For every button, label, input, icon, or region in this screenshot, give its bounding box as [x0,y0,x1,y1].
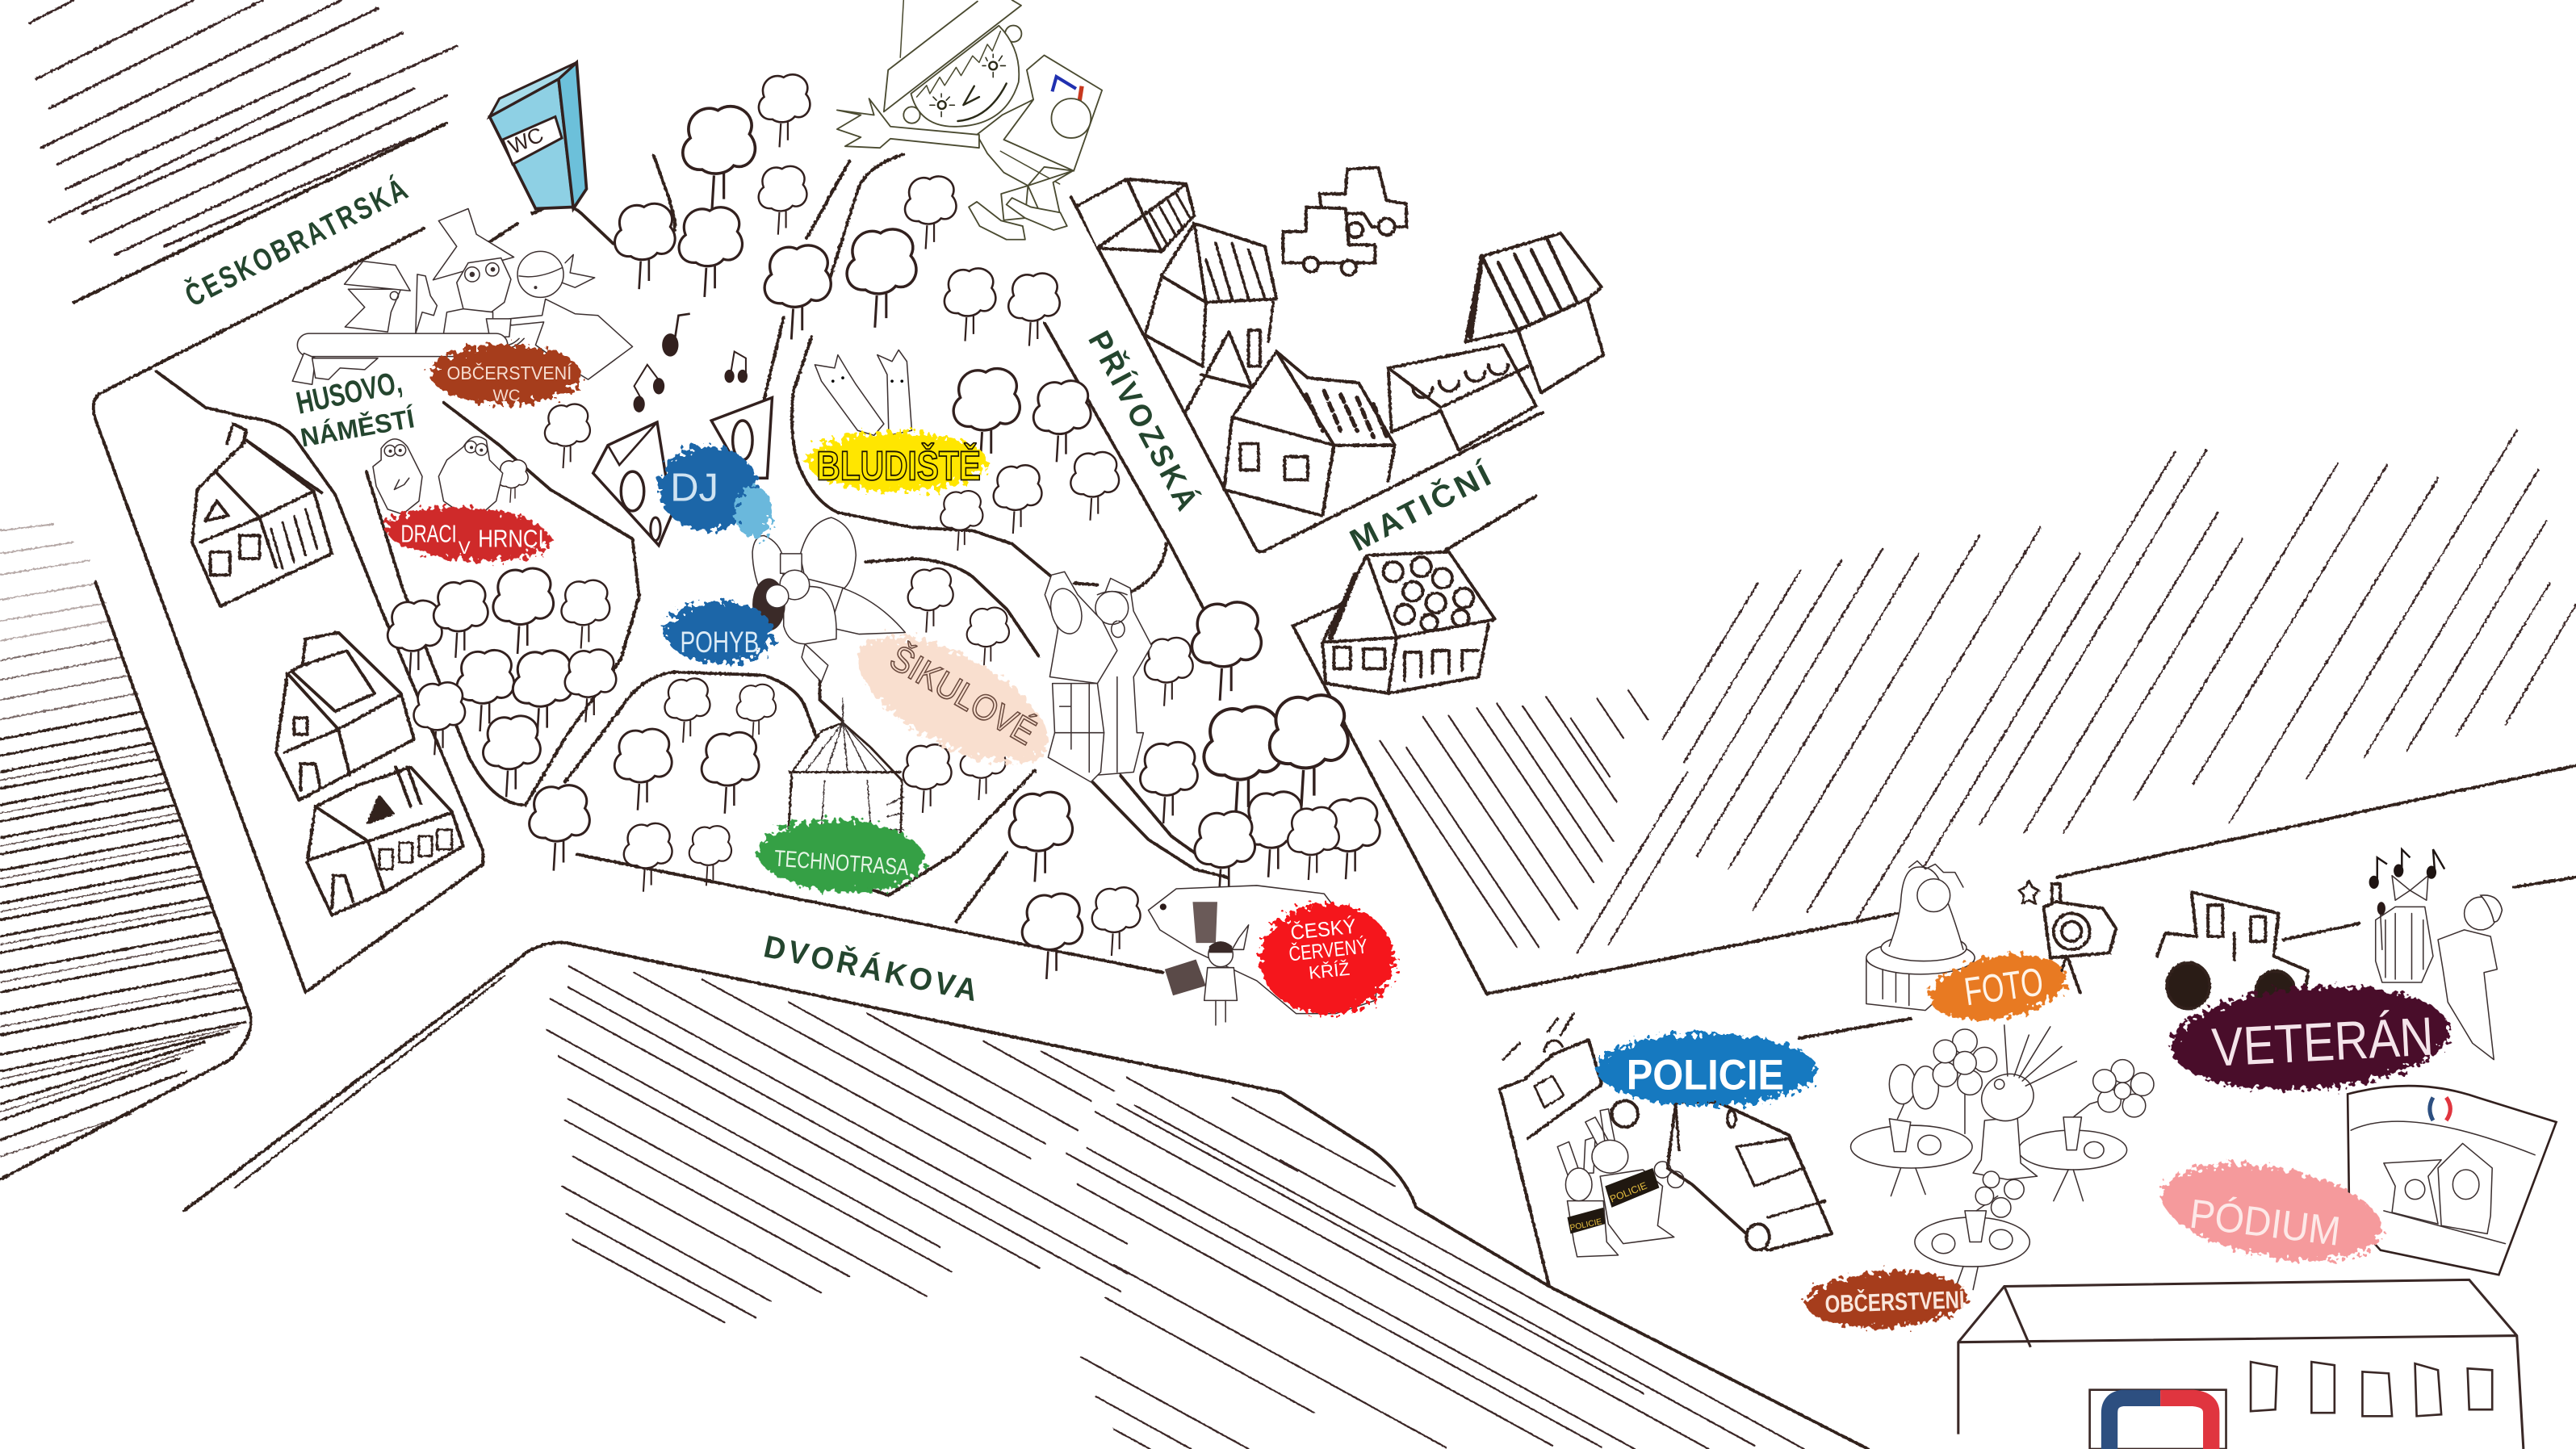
building with logo [1958,1279,2524,1449]
colored label: Občerstvení WC [430,345,581,405]
colored label: Veterán [2167,978,2452,1099]
colored label: DJ: DJ [670,467,718,510]
icon: left speaker [593,422,672,546]
street name: Dvořákova: DVOŘÁKOVA [760,928,983,1009]
house: Matiční [1322,552,1495,693]
colored label: Bludiště [806,432,987,492]
characters: singers with music notes [2369,849,2502,1060]
colored label: Český červený kříž: ČESKÝ [1289,915,1357,944]
colored label: Český červený kříž: ČERVENÝ [1288,934,1368,966]
trees in the park [387,74,1380,979]
character: hat man carrying box with flag [837,0,1102,240]
icon: camera on tripod [2019,881,2116,992]
colored label: Policie [1597,1033,1817,1106]
colored label: Draci v hrnci: V [459,538,471,558]
house: Husovo block middle [276,633,414,800]
stage with screen and dwarfs [2348,1086,2557,1275]
colored label: Technotrasa [756,815,927,896]
street name: Matiční: MATIČNÍ [1344,455,1499,559]
street name: Husovo náměstí: HUSOVO, [293,365,405,421]
street name: Husovo náměstí: NÁMĚSTÍ [298,403,417,452]
hatching: left dense field [0,524,251,1179]
street name: Přívozská: PŘÍVOZSKÁ [1081,325,1207,519]
colored label: Občerstvení WC: OBČERSTVENÍ [447,362,572,383]
house d [1389,345,1536,450]
colored label: DJ [659,446,772,539]
characters: group behind refreshment counter [292,208,633,384]
characters: two worm creatures [815,350,911,435]
colored label: Pódium: PÓDIUM [2187,1191,2343,1254]
colored label: Policie: POLICIE [1627,1051,1784,1099]
colored label: Draci v hrnci [384,502,552,566]
WC booth [489,62,587,208]
colored label: Foto [1925,944,2071,1030]
colored label: Draci v hrnci: HRNCI [478,526,544,553]
street name: Českobratrská: ČESKOBRATRSKÁ [179,170,415,314]
characters: big dog and little girl [1149,886,1380,1025]
colored label: Občerstvení [1804,1267,1968,1332]
icon: two toy cars [1283,168,1406,275]
house: Husovo block bottom [308,767,463,915]
colored label: Foto: FOTO [1962,960,2046,1014]
hatching: bottom centre field [547,966,1804,1449]
police van and rabbits: POLICIE [1608,1179,1648,1204]
colored label: Veterán: VETERÁN [2210,1006,2435,1078]
cafe tables with flowers and character [1851,1025,2154,1290]
colored label: Občerstvení WC: WC [493,387,520,405]
colored label: Občerstvení: OBČERSTVENÍ [1824,1284,1966,1318]
WC booth: WC [505,122,547,159]
icons: music notes [634,314,748,413]
tent [789,698,903,862]
street name: Husovo náměstí [293,365,417,452]
colored label: Bludiště: BLUDIŠTĚ [816,442,981,488]
colored label: Český červený kříž: KŘÍŽ [1308,959,1351,983]
colored label: Šikulové [840,611,1066,789]
police van and rabbits [1500,1014,1832,1257]
house e [1465,233,1603,392]
colored label: Český červený kříž [1260,903,1395,1016]
house b [1145,224,1276,366]
colored label: Pohyb [665,601,774,664]
colored label: Draci v hrnci: DRACI [401,521,457,548]
hatching: top-left field [30,0,457,254]
house: Husovo block top [192,424,332,606]
icon: veteran car [2157,892,2308,1014]
police van and rabbits: POLICIE [1569,1217,1603,1233]
character: butterfly fairy couple [752,517,905,682]
colored label: Pohyb: POHYB [681,626,759,659]
statue of girl on pedestal [1866,861,1975,1011]
colored label: Technotrasa: TECHNOTRASA [773,846,910,881]
icon: right speaker [711,398,772,478]
colored label: Šikulové: ŠIKULOVÉ [883,638,1043,753]
house a [1078,179,1195,251]
characters: two dragons in pots [373,437,503,514]
colored label: Pódium [2155,1150,2390,1275]
houses: Přívozská row [1078,179,1603,516]
character: two craftsmen Pat and Mat [1045,572,1152,782]
hatching: right fields [1380,430,2576,953]
house c [1186,330,1395,516]
